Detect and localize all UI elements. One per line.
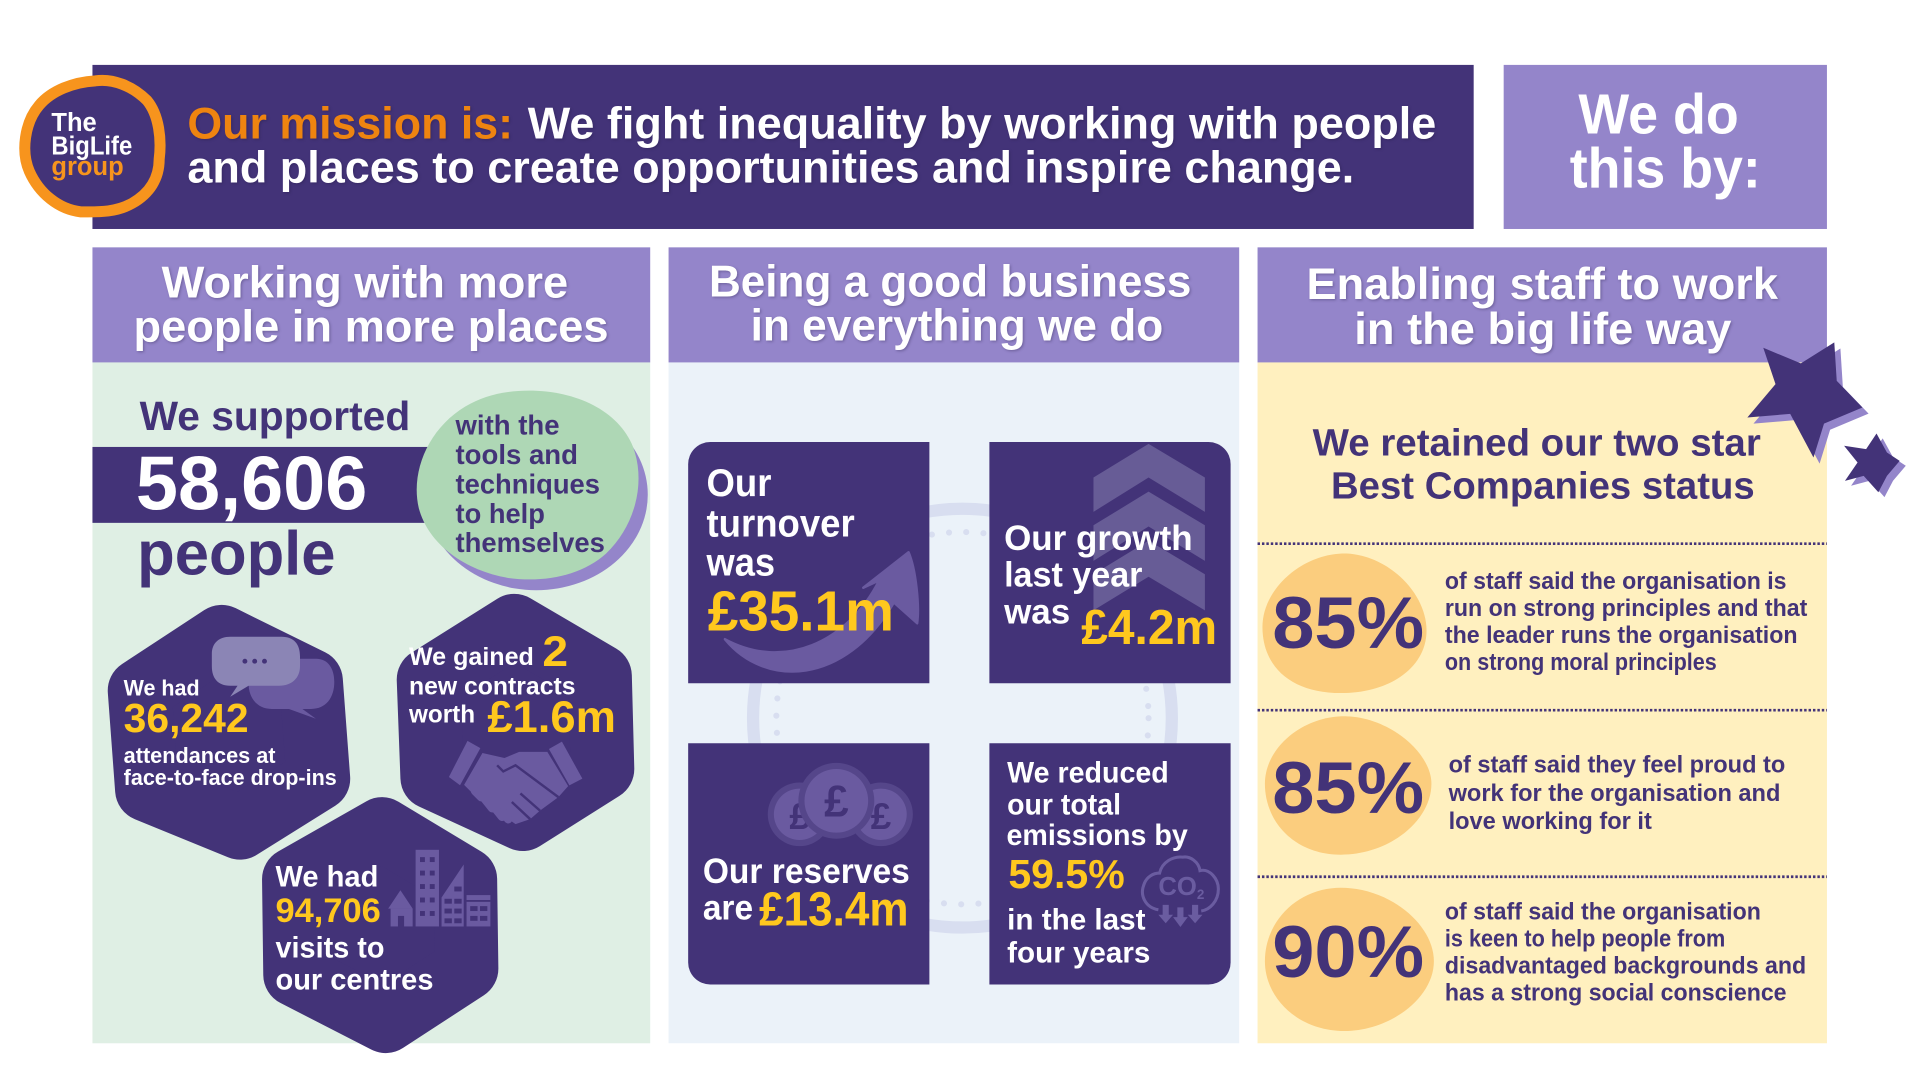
callout: tools and techniques: with the bbox=[455, 410, 560, 441]
stat: proud to work 85%: 85% bbox=[1272, 746, 1424, 829]
panel heading bbox=[669, 247, 1239, 362]
card: emissions: in the last bbox=[1007, 903, 1146, 936]
callout: tools and techniques: techniques bbox=[456, 468, 600, 499]
icon: pound coins bbox=[768, 763, 913, 846]
icon: CO2 cloud bbox=[1142, 857, 1218, 927]
hexagon: drop-in attendances: attendances at bbox=[124, 743, 276, 768]
subheading: best companies status: We retained our two star bbox=[1313, 423, 1761, 465]
icon: CO2 cloud: 2 bbox=[1197, 887, 1204, 902]
icon: large star bbox=[1747, 342, 1869, 464]
hexagon: drop-in attendances: face-to-face drop-ins bbox=[124, 765, 337, 790]
card: emissions: our total bbox=[1007, 788, 1121, 821]
icon: upward curved arrow bbox=[725, 552, 918, 672]
stat: strong principles 85%: the leader runs the organisation bbox=[1445, 622, 1798, 649]
card: reserves bbox=[688, 743, 929, 984]
headline number bbox=[92, 393, 448, 588]
mission statement: and places to create opportunities and inspire change. bbox=[187, 143, 1354, 192]
we do this by box bbox=[1504, 65, 1827, 229]
card: growth bbox=[989, 442, 1231, 683]
stat: strong principles 85%: of staff said the organisation is bbox=[1445, 568, 1787, 595]
card: growth: last year bbox=[1004, 555, 1143, 595]
mission statement bbox=[187, 99, 1436, 192]
header banner bbox=[92, 65, 1474, 229]
stat: proud to work 85%: love working for it bbox=[1449, 808, 1652, 835]
icon: chevrons bbox=[1093, 444, 1205, 610]
stat: strong principles 85% bbox=[1262, 553, 1807, 693]
hexagon: centre visits: visits to bbox=[276, 932, 384, 965]
mission statement: We fight inequality by working with people bbox=[528, 99, 1436, 148]
we do this by box: We do bbox=[1578, 82, 1739, 145]
hexagon: centre visits: 94,706 bbox=[276, 892, 381, 930]
panel heading: Being a good business bbox=[709, 257, 1191, 306]
subheading: best companies status bbox=[1313, 423, 1761, 507]
hexagon: new contracts: 2 bbox=[542, 628, 568, 676]
card: emissions: four years bbox=[1007, 936, 1150, 969]
card: reserves: Our reserves bbox=[703, 852, 910, 891]
card: reserves: £13.4m bbox=[759, 884, 909, 937]
logo: BigLife bbox=[51, 132, 132, 160]
card: growth: £4.2m bbox=[1081, 601, 1217, 655]
panel heading: Working with more bbox=[162, 259, 568, 308]
card: growth: was bbox=[1003, 591, 1070, 631]
stat: social conscience 90%: has a strong social conscience bbox=[1445, 979, 1787, 1006]
stat: strong principles 85%: 85% bbox=[1272, 581, 1424, 664]
hexagon: new contracts: We gained bbox=[409, 643, 534, 671]
headline number: We supported bbox=[140, 393, 410, 439]
icon: CO2 cloud: CO bbox=[1158, 873, 1197, 901]
panel: working with more people bbox=[92, 247, 650, 1043]
panel heading: in everything we do bbox=[751, 301, 1163, 350]
headline number: people bbox=[137, 518, 336, 588]
icon: speech bubbles bbox=[212, 637, 334, 719]
callout: tools and techniques: themselves bbox=[456, 527, 605, 558]
card: turnover: turnover bbox=[707, 502, 855, 545]
hexagon: new contracts bbox=[408, 626, 616, 824]
hexagon: drop-in attendances: We had bbox=[124, 676, 200, 701]
stat: social conscience 90%: disadvantaged backgrounds and bbox=[1445, 952, 1806, 979]
panel heading: people in more places bbox=[133, 303, 609, 352]
stat: social conscience 90%: of staff said the organisation bbox=[1445, 899, 1761, 926]
stat: social conscience 90%: is keen to help people from bbox=[1445, 926, 1725, 953]
panel: being a good business bbox=[669, 247, 1239, 1043]
card: turnover: was bbox=[706, 542, 775, 585]
card: emissions: We reduced bbox=[1007, 756, 1169, 789]
icon: small star bbox=[1844, 433, 1906, 497]
card: turnover: £35.1m bbox=[708, 580, 894, 643]
mission statement: Our mission is: bbox=[187, 99, 513, 148]
stat: proud to work 85% bbox=[1265, 716, 1785, 855]
hexagon: drop-in attendances bbox=[124, 637, 337, 828]
panel heading: in the big life way bbox=[1354, 305, 1732, 354]
card: turnover bbox=[688, 442, 929, 683]
card: emissions: emissions by bbox=[1007, 819, 1188, 852]
callout: tools and techniques bbox=[417, 391, 648, 590]
stat: strong principles 85%: run on strong principles and that bbox=[1445, 595, 1807, 622]
subheading: best companies status: Best Companies status bbox=[1331, 465, 1755, 507]
icon: pound coins: £ bbox=[871, 796, 892, 837]
logo bbox=[25, 80, 160, 212]
panel heading bbox=[92, 247, 650, 362]
stat: social conscience 90%: 90% bbox=[1272, 910, 1424, 993]
stat: proud to work 85%: of staff said they feel proud to bbox=[1449, 752, 1785, 779]
card: turnover: Our bbox=[707, 462, 771, 505]
stat: social conscience 90% bbox=[1265, 888, 1806, 1031]
panel heading bbox=[1258, 247, 1827, 362]
card: growth: Our growth bbox=[1004, 518, 1193, 558]
callout: tools and techniques: tools and bbox=[456, 439, 578, 470]
hexagon: drop-in attendances: 36,242 bbox=[124, 695, 249, 741]
icon: buildings bbox=[388, 850, 490, 927]
panel: enabling staff bbox=[1258, 247, 1827, 1043]
logo: group bbox=[51, 153, 124, 181]
hexagon: new contracts: new contracts bbox=[409, 672, 576, 700]
callout: tools and techniques: to help bbox=[456, 498, 545, 529]
card: emissions bbox=[989, 743, 1231, 984]
stat: strong principles 85%: on strong moral principles bbox=[1445, 649, 1717, 676]
hexagon: centre visits: We had bbox=[276, 861, 378, 894]
hexagon: new contracts: £1.6m bbox=[487, 693, 616, 742]
stat: proud to work 85%: work for the organisation and bbox=[1448, 780, 1780, 807]
we do this by box: this by: bbox=[1570, 136, 1761, 199]
panel heading: Enabling staff to work bbox=[1307, 260, 1778, 309]
headline number: 58,606 bbox=[136, 441, 367, 526]
icon: pound coins: £ bbox=[789, 796, 810, 837]
card: reserves: are bbox=[703, 889, 753, 928]
hexagon: new contracts: worth bbox=[408, 700, 475, 728]
logo: The bbox=[51, 109, 97, 137]
hexagon: centre visits bbox=[276, 829, 490, 1021]
hexagon: centre visits: our centres bbox=[276, 963, 433, 996]
card: emissions: 59.5% bbox=[1008, 851, 1125, 897]
icon: pound coins: £ bbox=[824, 778, 849, 827]
icon: handshake bbox=[449, 741, 582, 824]
